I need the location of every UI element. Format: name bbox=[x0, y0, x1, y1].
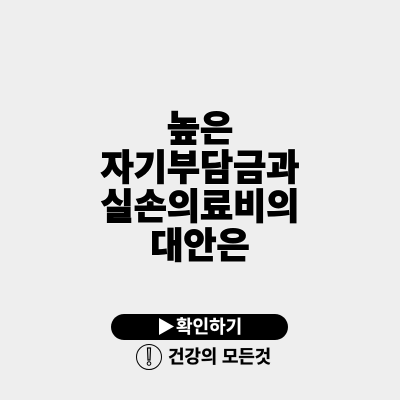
title: 높은 bbox=[167, 108, 233, 149]
title: 실손의료비의 bbox=[101, 186, 299, 227]
title: 자기부담금과 bbox=[101, 147, 299, 188]
title bbox=[100, 108, 299, 266]
subtitle: 건강의 모든것: 건강의 모든것 bbox=[168, 347, 271, 367]
icon: exclamation circle bbox=[136, 344, 162, 370]
button: 확인하기 bbox=[111, 314, 288, 340]
title: 대안은 bbox=[150, 225, 250, 266]
button: 확인하기: 확인하기 bbox=[176, 317, 242, 337]
